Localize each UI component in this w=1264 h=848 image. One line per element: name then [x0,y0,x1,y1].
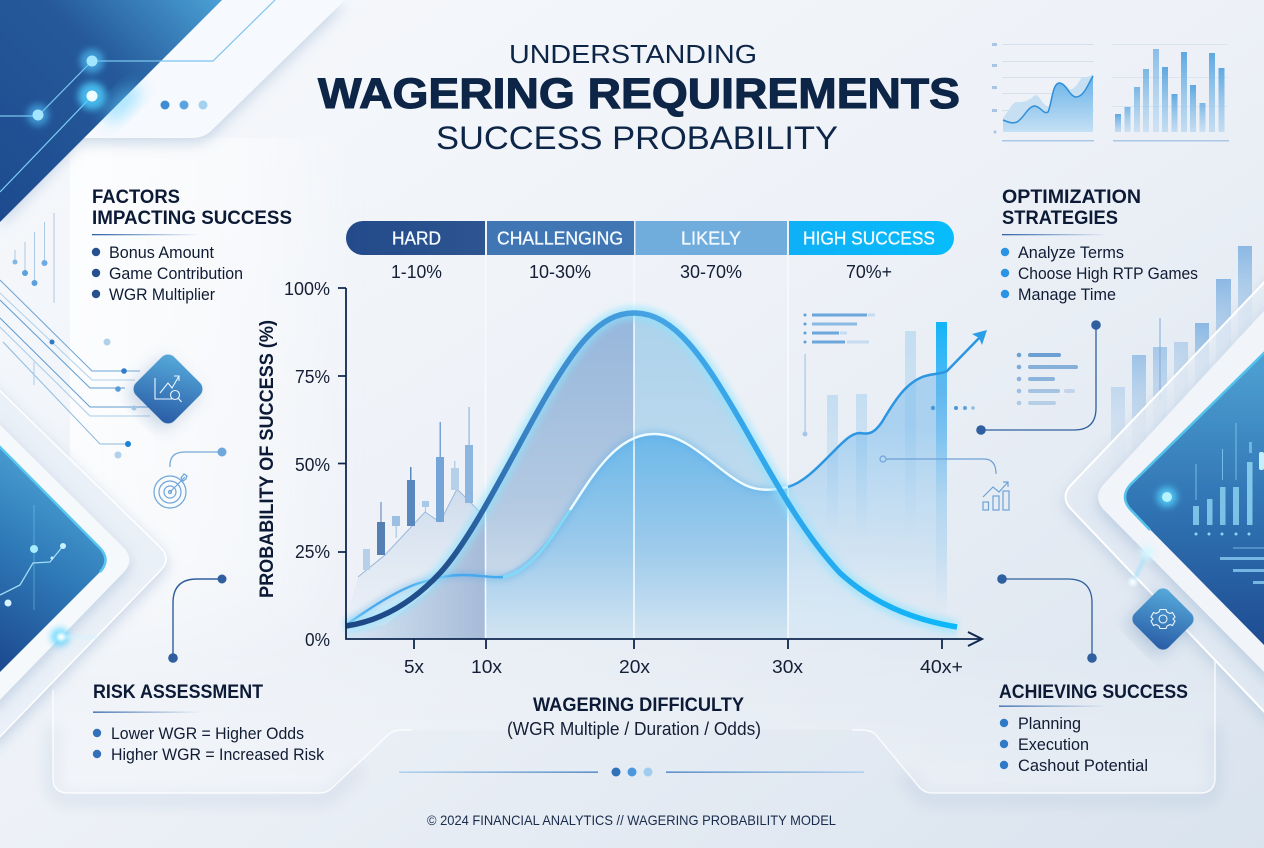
list icon right [1017,353,1078,405]
text: factors impacting success: Bonus Amount [109,243,214,262]
zone percentages: 70%+ [846,262,892,282]
y axis labels: 75% [295,367,330,387]
text: achieving success [999,682,1188,775]
small connector [880,456,996,474]
zone header band: HIGH SUCCESS [803,228,935,248]
candlesticks [346,407,480,632]
area: rising line [788,371,947,639]
curve: inner glow [346,434,788,625]
area: inner curve fill [486,434,788,639]
panel: right chevron plate [1066,272,1264,722]
x axis title [507,695,761,739]
text: risk assessment: Lower WGR = Higher Odds [111,724,304,743]
x axis labels: 5x [404,657,424,677]
text: risk assessment: RISK ASSESSMENT [93,682,263,703]
connector: risk [168,574,226,663]
mini list in chart [802,314,875,436]
y axis labels: 0% [305,630,330,650]
panel: left chevron plate [0,381,166,747]
x axis labels: 10x [471,657,502,677]
y axis labels: 50% [295,455,330,475]
panel: bottom card [53,640,1215,799]
title: UNDERSTANDING [509,39,757,69]
icon: growth chart [983,482,1009,510]
zone percentages: 1-10% [391,262,442,282]
text: optimization strategies: Choose High RTP Games [1018,264,1198,283]
zone percentages: 10-30% [529,262,591,282]
curve: rising line with arrow [788,330,987,487]
text: achieving success: ACHIEVING SUCCESS [999,682,1188,703]
x axis labels: 30x [772,657,803,677]
zone header band: CHALLENGING [497,228,623,248]
x axis labels [404,657,963,677]
icon: target [154,474,187,508]
area: high success zone under main curve [789,555,957,638]
y axis labels [284,279,330,650]
circuit lines left [0,213,150,458]
text: factors impacting success: Game Contribution [109,264,243,283]
curve: inner line [346,434,788,625]
mini bar chart [1112,44,1229,142]
panel: left soft column [70,193,198,572]
icon: analytics diamond [130,351,206,427]
text: factors impacting success [92,187,292,304]
title [318,39,960,156]
axes [338,288,982,649]
y axis title: PROBABILITY OF SUCCESS (%) [257,320,278,598]
text: optimization strategies: OPTIMIZATION [1002,187,1141,208]
curve: main line [346,313,957,627]
area: challenging zone [486,316,634,576]
text: optimization strategies [1001,187,1198,304]
text: optimization strategies: STRATEGIES [1002,208,1118,229]
bars: high success zone [827,322,947,612]
chart: probability curves [338,255,987,649]
connector: target [170,448,226,467]
text: achieving success: Cashout Potential [1018,756,1148,775]
zone header band: HARD [392,228,441,248]
footer divider [399,768,864,776]
icon: gear diamond [1129,585,1197,653]
zone header band: LIKELY [681,228,741,248]
x axis labels: 20x [619,657,650,677]
panel: top-left corner plate [0,0,345,222]
x axis title: WAGERING DIFFICULTY [533,695,744,716]
text: factors impacting success: IMPACTING SUCCESS [92,208,292,229]
footer text: © 2024 FINANCIAL ANALYTICS // WAGERING PROBABILITY MODEL [427,812,836,828]
zone percentages [391,262,892,282]
grid lines [486,255,788,639]
text: risk assessment [93,682,324,764]
text: factors impacting success: WGR Multiplier [109,285,215,304]
x axis labels: 40x+ [920,657,963,677]
y axis labels: 25% [295,542,330,562]
x axis title: (WGR Multiple / Duration / Odds) [507,719,761,739]
zone percentages: 30-70% [680,262,742,282]
connector: achieving [997,574,1097,663]
mini area chart [992,43,1094,142]
text: optimization strategies: Analyze Terms [1018,243,1124,262]
y axis labels: 100% [284,279,330,299]
text: achieving success: Planning [1018,714,1081,733]
curve: main glow [346,313,957,627]
dotted row [931,406,975,410]
connector: optimization [976,320,1101,435]
title: WAGERING REQUIREMENTS [318,70,960,118]
title: SUCCESS PROBABILITY [436,120,838,156]
text: optimization strategies: Manage Time [1018,285,1116,304]
text: achieving success: Execution [1018,735,1089,754]
text: factors impacting success: FACTORS [92,187,180,208]
background bars right [1111,246,1252,507]
area: likely zone [634,316,776,488]
zone header band [346,221,954,255]
area: hard zone [347,512,485,638]
text: risk assessment: Higher WGR = Increased Risk [111,745,324,764]
